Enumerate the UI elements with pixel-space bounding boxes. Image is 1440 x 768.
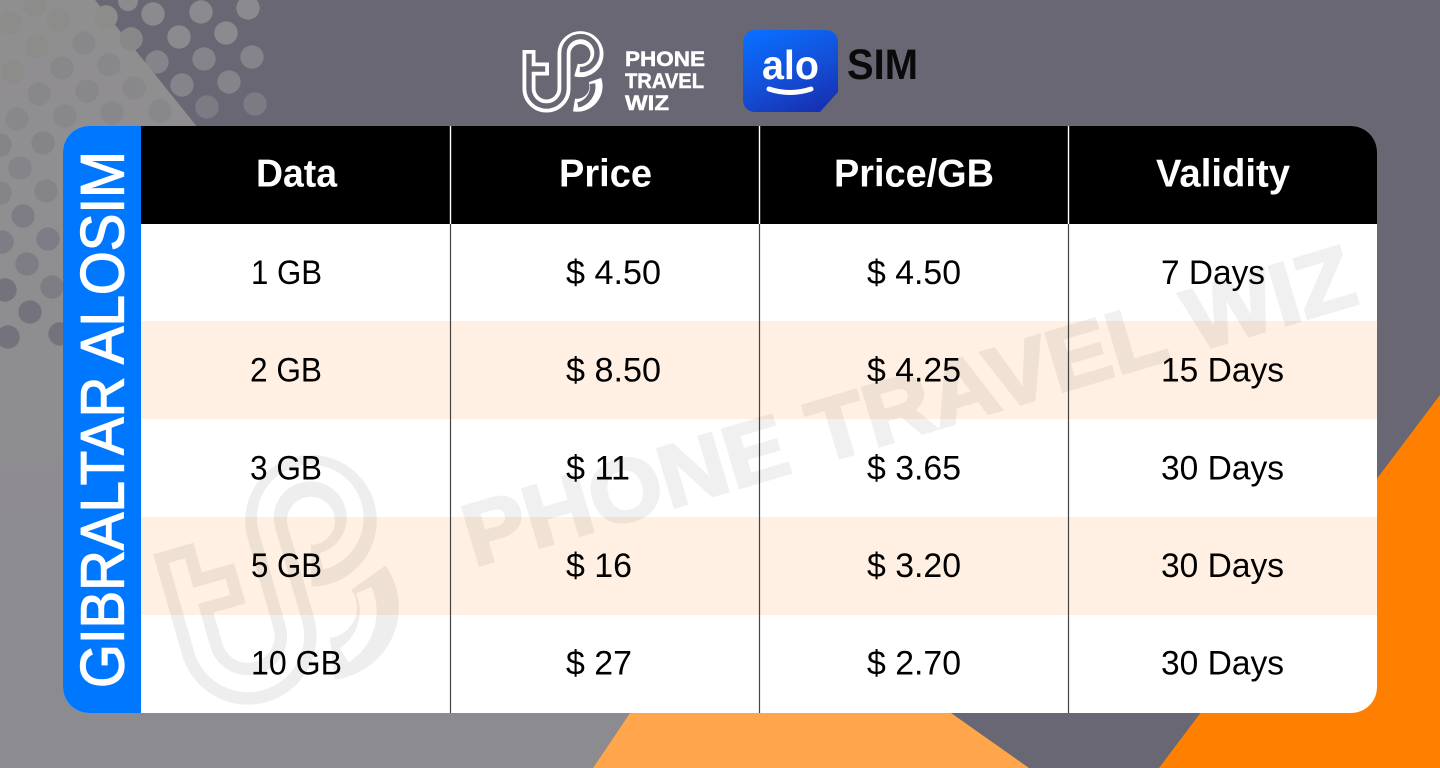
row: 10 GB: $ 27: [566, 644, 632, 682]
background: dots on gray wedge: [0, 0, 172, 349]
row: 5 GB: $ 3.20: [867, 547, 961, 585]
logo wordmark: PHONE: [625, 47, 705, 71]
row: 5 GB: 5 GB: [251, 547, 322, 585]
background: dark orange corner: [1159, 395, 1440, 768]
row: 3 GB: 30 Days: [1161, 450, 1284, 488]
table header row: Price: [559, 153, 652, 196]
table header row: Price/GB: [834, 153, 994, 196]
row: 5 GB: $ 16: [566, 547, 632, 585]
row: 1 GB: $ 4.50: [867, 254, 961, 292]
logo label SIM: SIM: [847, 41, 918, 89]
background: dots on dark area: [94, 0, 267, 119]
table header row: [256, 153, 1291, 196]
row: 2 GB: $ 4.25: [867, 352, 961, 390]
row: 2 GB: [250, 352, 1284, 390]
background: light orange trapezoid: [593, 713, 1029, 768]
row: 2 GB: 15 Days: [1161, 352, 1284, 390]
icon: alo sim card: [743, 30, 838, 112]
logo: alo SIM: [743, 30, 918, 112]
row: 3 GB: $ 3.65: [867, 450, 961, 488]
logo: Phone Travel Wiz: [529, 37, 705, 115]
row: 1 GB: 1 GB: [251, 254, 322, 292]
row: 5 GB: [251, 547, 1284, 585]
background: gray wedge top left: [0, 0, 630, 768]
panel: pricing table: [63, 126, 1377, 740]
logo wordmark: TRAVEL: [625, 69, 704, 93]
row: 10 GB: 30 Days: [1161, 644, 1284, 682]
row: 1 GB: [251, 254, 1265, 292]
logo wordmark: [625, 47, 705, 115]
table body background: [63, 126, 1377, 713]
row: 10 GB: $ 2.70: [867, 644, 961, 682]
table header row: Validity: [1156, 153, 1291, 196]
watermark logo: [154, 455, 399, 704]
row: 2 GB: 2 GB: [250, 352, 322, 390]
row: 1 GB: $ 4.50: [566, 254, 661, 292]
table header row: Data: [256, 153, 338, 196]
row: 3 GB: [250, 450, 1284, 488]
row: 3 GB: 3 GB: [250, 450, 322, 488]
row: 10 GB: [251, 644, 1284, 682]
row: 3 GB: $ 11: [566, 450, 630, 488]
row: 2 GB: $ 8.50: [566, 352, 661, 390]
icon: alo sim card: alo: [762, 42, 819, 88]
vertical title: GIBRALTAR ALOSIM: [68, 151, 138, 688]
row: 5 GB: 30 Days: [1161, 547, 1284, 585]
row: 10 GB: 10 GB: [251, 644, 342, 682]
watermark text: PHONE TRAVEL WIZ: [451, 226, 1366, 585]
logo wordmark: WIZ: [625, 91, 669, 115]
icon: tp monogram: [529, 37, 597, 106]
row: 1 GB: 7 Days: [1161, 254, 1265, 292]
